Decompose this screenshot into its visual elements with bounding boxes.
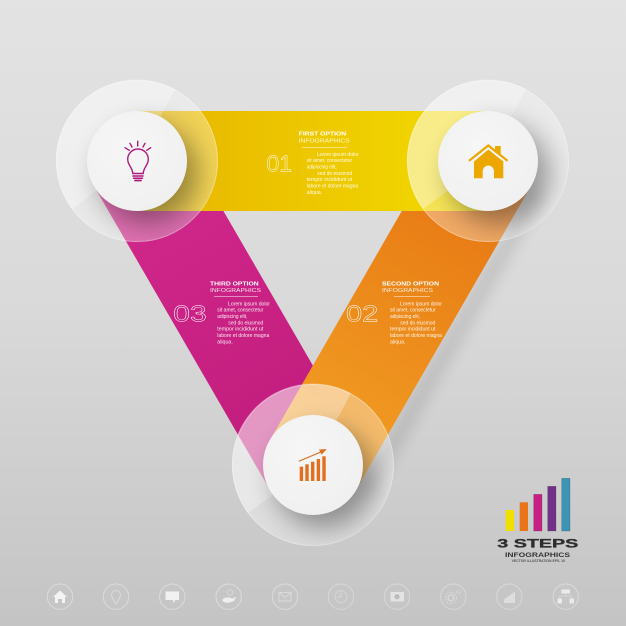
first option text block: labore et dolore magna <box>307 184 358 190</box>
second option text block <box>382 281 442 345</box>
first option text block <box>299 132 359 196</box>
third option text block: Lorem ipsum dolor <box>228 301 270 307</box>
third option text block <box>210 281 270 345</box>
third option text block: adipiscing elit, <box>217 314 247 320</box>
small icon: bulb <box>103 584 129 609</box>
small icon: hand with coin <box>216 584 241 609</box>
node: bottom glass circle with chart <box>232 383 394 546</box>
icon: house <box>468 144 508 178</box>
logo bars <box>506 478 570 531</box>
second option text block: Lorem ipsum dolor <box>400 301 442 307</box>
logo wordmark: 3 STEPS <box>497 537 578 551</box>
first option text block: FIRST OPTION <box>299 132 346 138</box>
logo subtitle: INFOGRAPHICS <box>505 552 571 559</box>
first option text block: sit amet, consectetur <box>307 158 352 164</box>
first option text block: aliqua. <box>307 190 322 196</box>
third option text block: THIRD OPTION <box>210 281 259 287</box>
small icon: banknote <box>384 584 410 609</box>
second option text block: adipiscing elit, <box>390 314 420 320</box>
logo: 3 steps infographics <box>497 478 578 563</box>
small icon: growth bars <box>497 584 522 609</box>
third option text block: sed do eiusmod <box>228 320 263 326</box>
third option text block: labore et dolore magna <box>217 333 269 339</box>
small icon: speech bubble <box>160 584 185 609</box>
second option text block: tempor incididunt ut <box>390 327 436 333</box>
second option text block: INFOGRAPHICS <box>382 288 433 294</box>
node: top-right glass circle with house <box>407 79 569 242</box>
first option text block: Lorem ipsum dolor <box>317 152 359 158</box>
first option text block: INFOGRAPHICS <box>299 138 350 144</box>
first option text block: tempor incididunt ut <box>307 177 353 183</box>
number 01: 01 <box>266 150 292 176</box>
band: second option (orange) <box>270 136 531 490</box>
third option text block: sit amet, consectetur <box>217 308 264 314</box>
second option text block: sit amet, consectetur <box>390 308 436 314</box>
small icon: clock <box>328 584 354 609</box>
logo small print: VECTOR ILLUSTRATION EPS. 10 <box>512 559 565 563</box>
band: third option (magenta) <box>94 136 356 490</box>
small icon: envelope <box>272 584 298 609</box>
small icon: org chart <box>553 584 578 609</box>
third option text block: INFOGRAPHICS <box>210 288 261 294</box>
small icon: home <box>47 584 73 609</box>
second option text block: labore et dolore magna <box>390 333 442 339</box>
icon: light bulb <box>125 141 151 180</box>
icon: rising bar chart <box>299 449 327 481</box>
number 02: 02 <box>346 300 378 326</box>
third option text block: aliqua. <box>217 339 233 345</box>
third option text block: tempor incididunt ut <box>217 327 264 333</box>
small icon: gears <box>441 584 466 609</box>
node: top-left glass circle with bulb <box>56 79 218 242</box>
band: first option (yellow) <box>137 111 488 211</box>
second option text block: sed do eiusmod <box>400 320 435 326</box>
bottom icon row <box>47 584 578 609</box>
second option text block: aliqua. <box>390 339 406 345</box>
first option text block: sed do eiusmod <box>317 171 352 177</box>
second option text block: SECOND OPTION <box>382 281 439 287</box>
first option text block: adipiscing elit, <box>307 165 337 171</box>
number 03: 03 <box>173 300 207 326</box>
